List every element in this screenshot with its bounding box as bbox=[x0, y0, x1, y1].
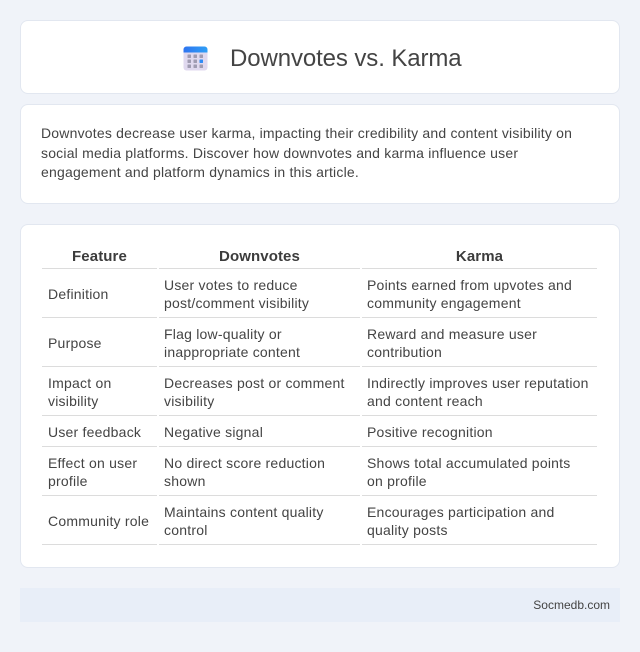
row: user feedback bbox=[48, 424, 493, 440]
row: definition: post/comment visibility bbox=[164, 295, 309, 311]
row: purpose: Reward and measure user bbox=[367, 326, 537, 342]
row: community role bbox=[48, 504, 555, 538]
row: effect on user profile: No direct score reduction bbox=[164, 455, 325, 471]
intro text bbox=[41, 125, 572, 180]
title: Downvotes vs. Karma bbox=[230, 45, 462, 72]
footer bar bbox=[20, 588, 620, 622]
table card bbox=[20, 224, 620, 568]
title card bbox=[20, 20, 620, 94]
row: effect on user profile: profile bbox=[48, 473, 88, 489]
intro text: social media platforms. Discover how downvotes and karma influence user bbox=[41, 144, 518, 160]
icon: calendar bbox=[184, 46, 208, 70]
row: purpose: Purpose bbox=[48, 335, 102, 351]
row: purpose: Flag low-quality or bbox=[164, 326, 282, 342]
row: impact on visibility: Decreases post or comment bbox=[164, 375, 345, 391]
row: definition: Points earned from upvotes and bbox=[367, 277, 572, 293]
row: definition: Definition bbox=[48, 286, 109, 302]
intro text: engagement and platform dynamics in this article. bbox=[41, 164, 359, 180]
row: impact on visibility: visibility bbox=[164, 393, 214, 409]
row: purpose bbox=[48, 326, 537, 360]
row: impact on visibility: Impact on bbox=[48, 375, 111, 391]
row: effect on user profile: Effect on user bbox=[48, 455, 137, 471]
row: impact on visibility bbox=[48, 375, 589, 409]
row: purpose: inappropriate content bbox=[164, 344, 300, 360]
row: definition: User votes to reduce bbox=[164, 277, 298, 293]
row: impact on visibility: Indirectly improves user reputation bbox=[367, 375, 589, 391]
row: user feedback: User feedback bbox=[48, 424, 141, 440]
row: definition: community engagement bbox=[367, 295, 521, 311]
row: community role: Community role bbox=[48, 513, 149, 529]
row: effect on user profile: on profile bbox=[367, 473, 427, 489]
row: effect on user profile: shown bbox=[164, 473, 206, 489]
header: feature: Feature bbox=[72, 248, 127, 265]
row: effect on user profile bbox=[48, 455, 570, 489]
row: user feedback: Positive recognition bbox=[367, 424, 493, 440]
header: karma: Karma bbox=[456, 248, 503, 265]
row: user feedback: Negative signal bbox=[164, 424, 263, 440]
row: definition bbox=[48, 277, 572, 311]
row: community role: Encourages participation and bbox=[367, 504, 555, 520]
row: purpose: contribution bbox=[367, 344, 442, 360]
intro card bbox=[20, 104, 620, 204]
row: community role: quality posts bbox=[367, 522, 448, 538]
comparison table bbox=[42, 248, 597, 545]
intro text: Downvotes decrease user karma, impacting their credibility and content visibility on bbox=[41, 125, 572, 141]
row: community role: control bbox=[164, 522, 208, 538]
header: downvotes: Downvotes bbox=[219, 248, 300, 265]
footer text: Socmedb.com bbox=[533, 598, 610, 612]
row: community role: Maintains content quality bbox=[164, 504, 324, 520]
row: impact on visibility: and content reach bbox=[367, 393, 483, 409]
row: effect on user profile: Shows total accumulated points bbox=[367, 455, 570, 471]
row: impact on visibility: visibility bbox=[48, 393, 98, 409]
